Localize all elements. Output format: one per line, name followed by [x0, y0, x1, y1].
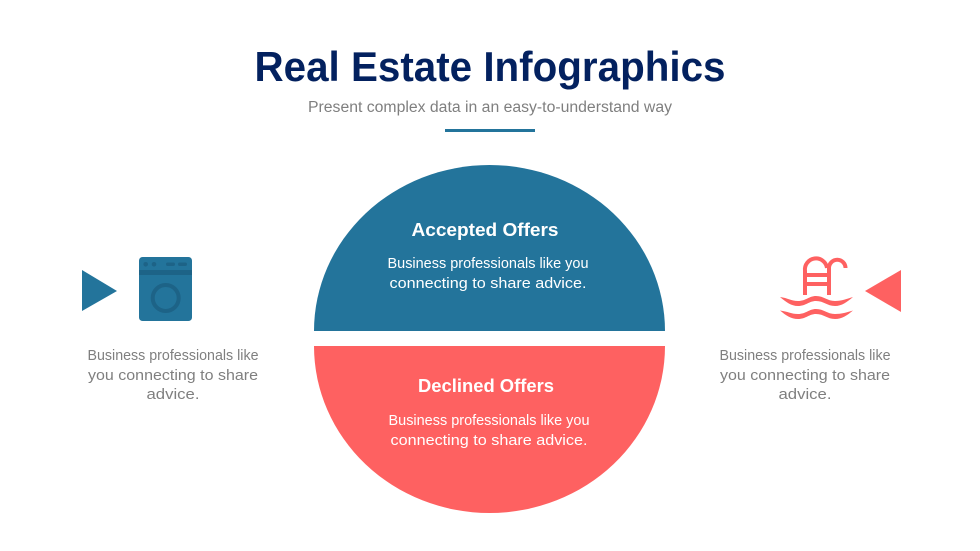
left text block: Business professionals like	[88, 347, 258, 364]
right text block: you connecting to share	[720, 367, 890, 384]
icon: swimming pool	[780, 258, 853, 319]
declined offers heading: Declined Offers	[418, 375, 554, 396]
declined offers text: Business professionals like you	[388, 412, 590, 429]
accepted offers text: connecting to share advice.	[390, 275, 586, 292]
subtitle: Present complex data in an easy-to-understand way	[308, 99, 672, 116]
right text block: Business professionals like	[720, 347, 890, 364]
arrow: right triangle	[865, 270, 901, 312]
icon: washing machine	[139, 257, 192, 321]
title underline	[445, 129, 535, 132]
panel: declined offers semicircle	[314, 346, 665, 513]
accepted offers heading: Accepted Offers	[412, 219, 558, 240]
right text block: advice.	[778, 386, 832, 403]
arrow: left triangle	[82, 270, 117, 311]
declined offers text: connecting to share advice.	[390, 432, 588, 449]
left text block: you connecting to share	[88, 367, 258, 384]
title: Real Estate Infographics	[254, 43, 726, 90]
accepted offers text: Business professionals like you	[388, 255, 588, 272]
left text block: advice.	[146, 386, 200, 403]
panel: accepted offers semicircle	[314, 165, 665, 331]
